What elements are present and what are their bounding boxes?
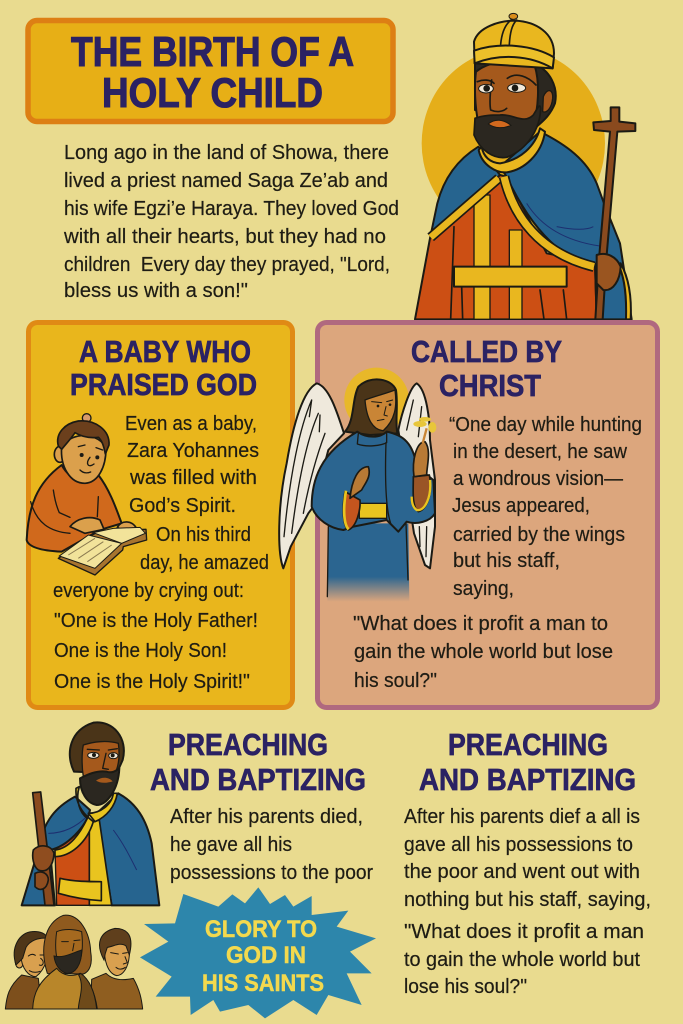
sleeves and hands bbox=[343, 442, 431, 530]
blue cape bbox=[22, 793, 159, 905]
gold collar and trim bbox=[55, 787, 117, 905]
left wing bbox=[279, 383, 344, 568]
head bbox=[54, 414, 109, 483]
facial features bbox=[87, 749, 118, 783]
panel: a baby who praised God bbox=[27, 322, 292, 708]
heading: PRAISED GOD bbox=[70, 367, 257, 402]
illustration: group of three people bbox=[5, 915, 143, 1009]
heading bbox=[70, 334, 257, 402]
left child bbox=[5, 931, 48, 1009]
heading: AND BAPTIZING bbox=[419, 762, 636, 797]
red robe bbox=[55, 823, 112, 905]
illustration: saint with halo and cross bbox=[415, 13, 635, 319]
body text: nothing but his staff, saying, bbox=[404, 889, 651, 911]
body text: On his third bbox=[156, 524, 251, 546]
body text: his soul?" bbox=[354, 670, 437, 692]
body text: he gave all his bbox=[170, 834, 292, 856]
face bbox=[365, 390, 396, 431]
body text bbox=[53, 413, 269, 693]
intro text: his wife Egzi’e Haraya. They loved God bbox=[64, 198, 399, 220]
heading: PREACHING bbox=[168, 727, 328, 762]
body text: Jesus appeared, bbox=[452, 495, 590, 517]
body text: possessions to the poor bbox=[170, 862, 373, 884]
halo bbox=[422, 48, 605, 238]
starburst callout: GLORY TO bbox=[205, 916, 317, 943]
right child bbox=[91, 928, 143, 1009]
intro text bbox=[63, 142, 399, 302]
open book bbox=[58, 527, 147, 575]
heading: AND BAPTIZING bbox=[150, 762, 366, 797]
beard bbox=[80, 768, 119, 805]
body text: "What does it profit a man to bbox=[353, 613, 608, 635]
center bearded man bbox=[33, 915, 97, 1009]
illustration: baby reading a book bbox=[27, 414, 147, 575]
body text: lose his soul?" bbox=[404, 976, 527, 998]
illustration: angel with wings bbox=[279, 368, 436, 602]
right wing bbox=[398, 383, 435, 568]
body text: saying, bbox=[453, 578, 514, 600]
heading bbox=[419, 727, 636, 797]
heading bbox=[411, 334, 562, 403]
heading: CHRIST bbox=[439, 368, 541, 403]
flower bbox=[413, 417, 436, 443]
body text: "What does it profit a man bbox=[404, 921, 644, 943]
heading: A BABY WHO bbox=[79, 334, 251, 369]
panel: called by Christ bbox=[279, 322, 658, 708]
hands bbox=[33, 846, 54, 889]
body text: a wondrous vision— bbox=[453, 468, 623, 490]
crown hat bbox=[474, 13, 554, 68]
body text bbox=[404, 806, 651, 998]
intro text: bless us with a son!" bbox=[64, 280, 248, 302]
illustration: bearded saint with staff bbox=[22, 722, 159, 905]
staff bbox=[33, 792, 54, 905]
starburst callout bbox=[140, 887, 376, 1018]
section: preaching and baptizing, right bbox=[404, 727, 651, 998]
orange sweater bbox=[27, 465, 122, 552]
body text: One is the Holy Spirit!" bbox=[54, 671, 250, 693]
face bbox=[475, 61, 538, 143]
body text: gain the whole world but lose bbox=[354, 641, 613, 663]
hair and ear bbox=[475, 63, 556, 127]
body text: carried by the wings bbox=[453, 524, 625, 546]
body text: but his staff, bbox=[453, 550, 560, 572]
hair bbox=[70, 722, 124, 773]
beard bbox=[474, 106, 541, 158]
intro text: with all their hearts, but they had no bbox=[63, 226, 386, 248]
body text: was filled with bbox=[129, 467, 257, 489]
body text: in the desert, he saw bbox=[453, 441, 628, 463]
body text: God’s Spirit. bbox=[129, 495, 236, 517]
section: preaching and baptizing, left bbox=[150, 727, 373, 884]
heading: CALLED BY bbox=[411, 334, 562, 369]
body text: everyone by crying out: bbox=[53, 580, 244, 602]
starburst callout: HIS SAINTS bbox=[202, 970, 324, 997]
body text: After his parents dief a all is bbox=[404, 806, 640, 828]
body text bbox=[353, 414, 642, 692]
body text: After his parents died, bbox=[170, 806, 363, 828]
hand holding staff bbox=[597, 254, 621, 290]
title banner bbox=[28, 20, 393, 122]
hair bbox=[345, 379, 397, 435]
body text: Even as a baby, bbox=[125, 413, 257, 435]
body text: gave all his possessions to bbox=[404, 834, 633, 856]
body text: the poor and went out with bbox=[404, 861, 640, 883]
body text: “One day while hunting bbox=[449, 414, 642, 436]
halo bbox=[344, 368, 409, 432]
title banner: THE BIRTH OF A bbox=[71, 28, 354, 75]
intro text: Long ago in the land of Showa, there bbox=[64, 142, 389, 164]
red robe bbox=[415, 175, 597, 319]
starburst callout: GOD IN bbox=[226, 942, 306, 969]
body text: "One is the Holy Father! bbox=[54, 610, 258, 632]
mouth and facial features bbox=[477, 75, 553, 128]
body text bbox=[170, 806, 373, 884]
heading: PREACHING bbox=[448, 727, 608, 762]
body text: to gain the whole world but bbox=[404, 949, 640, 971]
body text: One is the Holy Son! bbox=[54, 640, 227, 662]
gold belt bbox=[359, 503, 387, 518]
gold trim bbox=[431, 128, 631, 319]
wooden cross staff bbox=[593, 107, 635, 319]
face bbox=[82, 742, 119, 777]
intro text: children Every day they prayed, "Lord, bbox=[64, 254, 390, 276]
hands bbox=[70, 518, 137, 533]
blue cape bbox=[430, 132, 632, 319]
title banner: HOLY CHILD bbox=[102, 69, 323, 116]
heading bbox=[150, 727, 366, 797]
intro text: lived a priest named Saga Ze’ab and bbox=[64, 170, 388, 192]
body text: day, he amazed bbox=[140, 552, 269, 574]
body text: Zara Yohannes bbox=[127, 440, 259, 462]
blue robe bbox=[312, 432, 435, 602]
